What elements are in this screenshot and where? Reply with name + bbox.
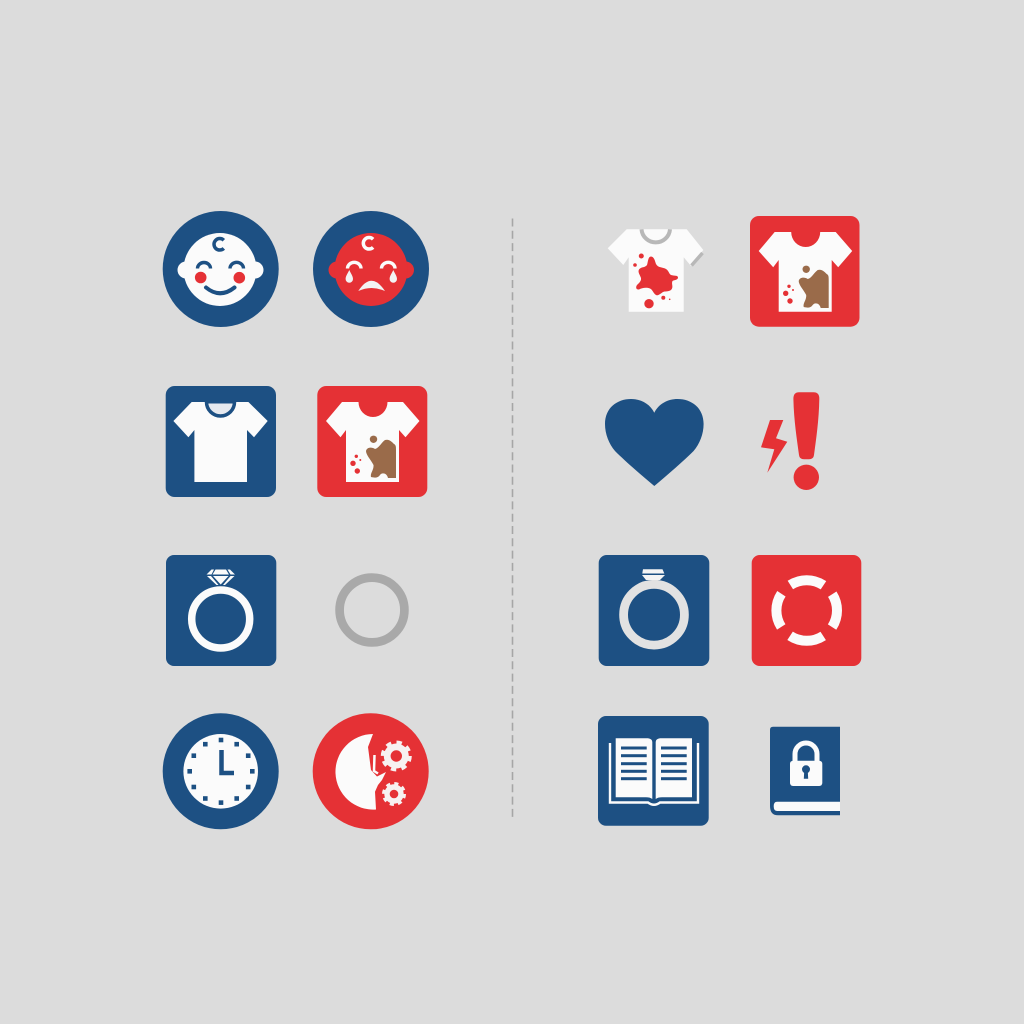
icon: white shirt with red splat bbox=[608, 229, 703, 312]
icon: heart bbox=[605, 399, 704, 486]
icon: ring with flat stone bbox=[599, 555, 709, 666]
icon: crying baby bbox=[313, 211, 429, 327]
icon: clean shirt on blue bbox=[166, 386, 276, 497]
icon: stained shirt on red (right) bbox=[750, 216, 860, 327]
icon: clock bbox=[163, 713, 279, 829]
icon: plain grey ring bbox=[340, 578, 404, 642]
icon: open book bbox=[598, 716, 709, 826]
icon: head with gears bbox=[313, 713, 429, 829]
icon: small gear bbox=[384, 784, 404, 804]
icon: happy baby bbox=[163, 211, 279, 327]
icon: lightning and exclamation mark bbox=[761, 392, 819, 490]
icon: locked book bbox=[770, 727, 840, 815]
icon: lifebuoy bbox=[752, 555, 861, 666]
icon: ring with diamond bbox=[166, 555, 276, 666]
icon: stained shirt on red (left) bbox=[317, 386, 427, 497]
icon: large gear bbox=[383, 742, 410, 770]
